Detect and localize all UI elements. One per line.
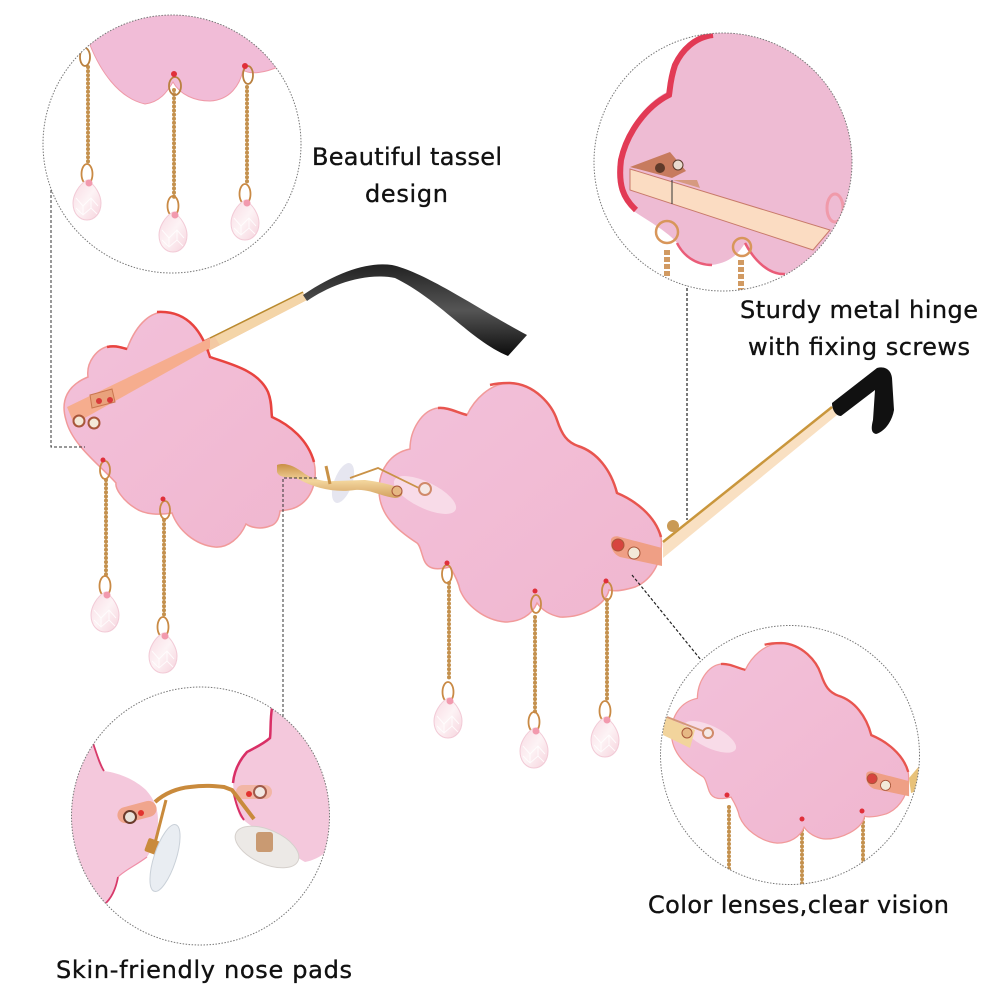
partial lens right [233, 708, 330, 862]
rings and chains [656, 221, 678, 243]
lens: right cloud [379, 383, 662, 622]
callout line: lenses [632, 575, 701, 660]
heading: metal hinge: Sturdy metal hinge [740, 296, 978, 324]
panel: hinge detail [594, 30, 860, 291]
nose bridge [277, 464, 431, 498]
heading: metal hinge [740, 296, 978, 361]
partial lens left [72, 745, 158, 903]
heading: metal hinge: with fixing screws [748, 333, 970, 361]
heading: nose pads: Skin-friendly nose pads [56, 956, 352, 984]
panel: tassel detail [30, 0, 301, 273]
arm inside lens [67, 338, 210, 424]
metal studs [117, 800, 157, 824]
hinge with screws [630, 152, 686, 178]
tassels: right lens [434, 560, 619, 768]
nose pad behind bridge [327, 460, 359, 506]
chains [88, 67, 247, 197]
hinge screw on top [667, 520, 679, 532]
panel: lenses detail [660, 626, 920, 885]
temple arm: right [663, 367, 894, 558]
panel: nose pads detail [60, 687, 340, 945]
heading: color lenses: Color lenses,clear vision [648, 891, 949, 919]
callout line: tassel [51, 170, 85, 447]
tassel chains [729, 807, 863, 885]
heading: tassel design: design [365, 180, 448, 208]
nose pad on lens [389, 468, 461, 522]
temple arm: left [67, 264, 527, 423]
bridge stub [663, 716, 695, 748]
callout line: nose pads [283, 478, 317, 730]
lens: left cloud [64, 312, 315, 547]
silicone pad left [150, 824, 180, 892]
tassels: left lens [91, 458, 177, 673]
lens close-up [617, 30, 860, 274]
hinge screws [74, 416, 84, 426]
temple tip: right [832, 367, 894, 434]
callout line: hinge [686, 278, 688, 520]
silicone pad right [234, 826, 300, 868]
gold bridge [155, 786, 254, 819]
heading: tassel design: Beautiful tassel [312, 143, 502, 171]
metal temple band [630, 169, 830, 250]
heading: tassel design [312, 143, 502, 208]
hinge block [90, 389, 115, 408]
lens bottom edge [89, 15, 276, 104]
hinge plate [611, 536, 662, 566]
temple tip: left [303, 264, 527, 356]
small cloud lens [671, 643, 909, 843]
red lens edge [620, 35, 713, 210]
